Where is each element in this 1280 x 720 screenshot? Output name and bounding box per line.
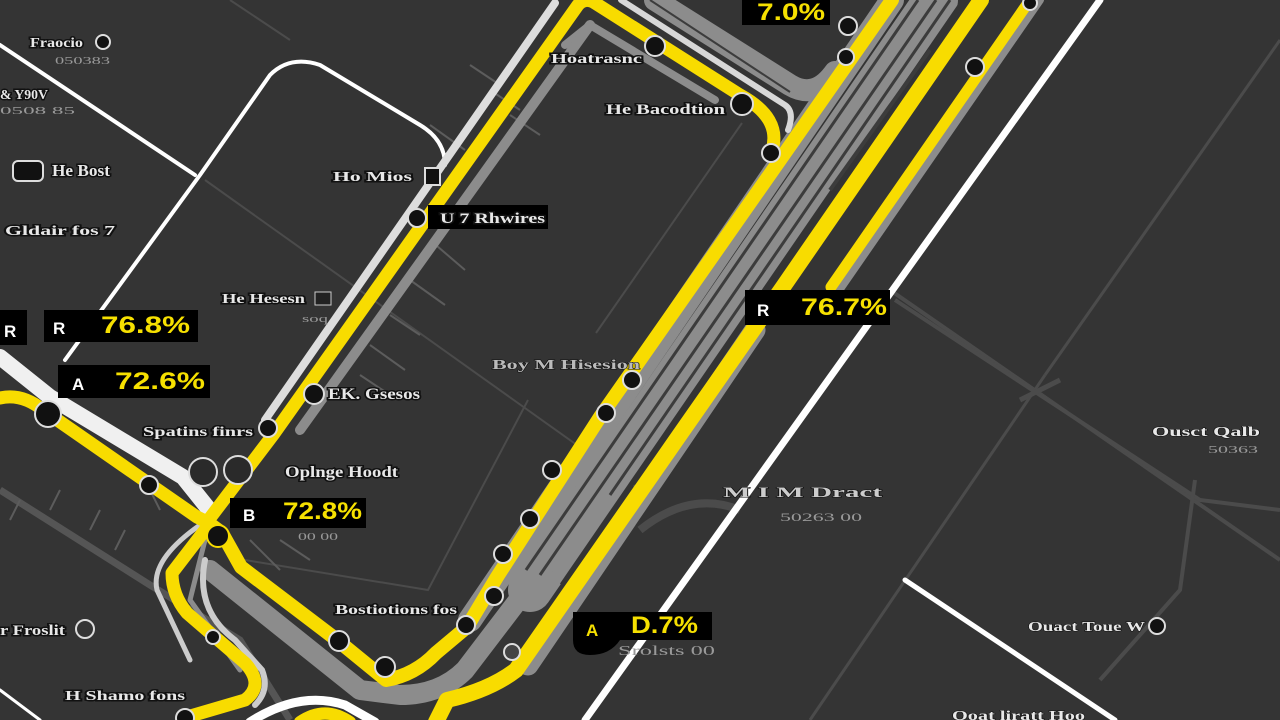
map labels: M I M Dract <box>723 485 882 501</box>
tick marks <box>10 65 540 570</box>
callout: A 72.6% <box>58 365 210 398</box>
map labels: Ousct Qalb <box>1152 425 1260 440</box>
map labels: EK. Gsesos <box>328 386 420 403</box>
callout: R 76.8%: 76.8% <box>101 312 190 339</box>
map labels: U 7 Rhwires <box>440 211 545 227</box>
map labels: Boy M Hisesion <box>492 358 640 373</box>
map labels: r Froslit <box>0 623 65 639</box>
map labels: Ouact Toue W <box>1028 620 1145 635</box>
callout: A 0.7%: A <box>586 621 598 640</box>
gray roads <box>190 0 1040 695</box>
map labels: 00 00 <box>298 532 338 543</box>
map labels: soq <box>302 314 328 325</box>
map labels: 50263 00 <box>780 510 862 524</box>
callout: A 0.7%: D.7% <box>631 612 698 639</box>
callout: R 76.7%: 76.7% <box>801 294 887 321</box>
callout: R 76.7%: R <box>757 301 769 320</box>
map labels: Ho Mios <box>333 170 413 185</box>
map labels: Spatins finrs <box>143 425 254 440</box>
percentage callouts <box>0 0 890 655</box>
road stripes <box>526 0 964 585</box>
map labels: Hoatrasnc <box>551 52 642 67</box>
map labels: Gldair fos 7 <box>5 224 115 239</box>
callout: R 76.8%: R <box>53 319 65 338</box>
callout: A 0.7% <box>573 612 712 655</box>
map labels: & Y90V <box>0 88 48 103</box>
callout: B 72.8%: B <box>243 506 255 525</box>
map labels: He Bacodtion <box>606 102 726 118</box>
callout: B 72.8%: 72.8% <box>283 498 362 525</box>
callout: R 76.8%: R <box>4 322 16 341</box>
map labels: Srolsts 00 <box>618 644 715 659</box>
map labels: 50363 <box>1208 445 1258 456</box>
callout: R 76.7% <box>745 290 890 325</box>
map labels: Bostiotions fos <box>335 603 458 618</box>
map labels: Oplnge Hoodt <box>285 464 399 481</box>
map labels: H Shamo fons <box>65 689 186 704</box>
callout: A 72.6%: 72.6% <box>115 368 205 395</box>
map labels: He Hesesn <box>222 292 305 307</box>
callout: A 72.6%: A <box>72 375 84 394</box>
callout: B 72.8% <box>230 498 366 528</box>
map labels: Fraocio <box>30 36 83 51</box>
map labels: He Bost <box>52 161 110 180</box>
callout: top <box>742 0 830 26</box>
callout: R 76.8% <box>0 310 198 345</box>
map labels: 050383 <box>55 56 110 67</box>
map labels: 0508 85 <box>0 106 75 117</box>
